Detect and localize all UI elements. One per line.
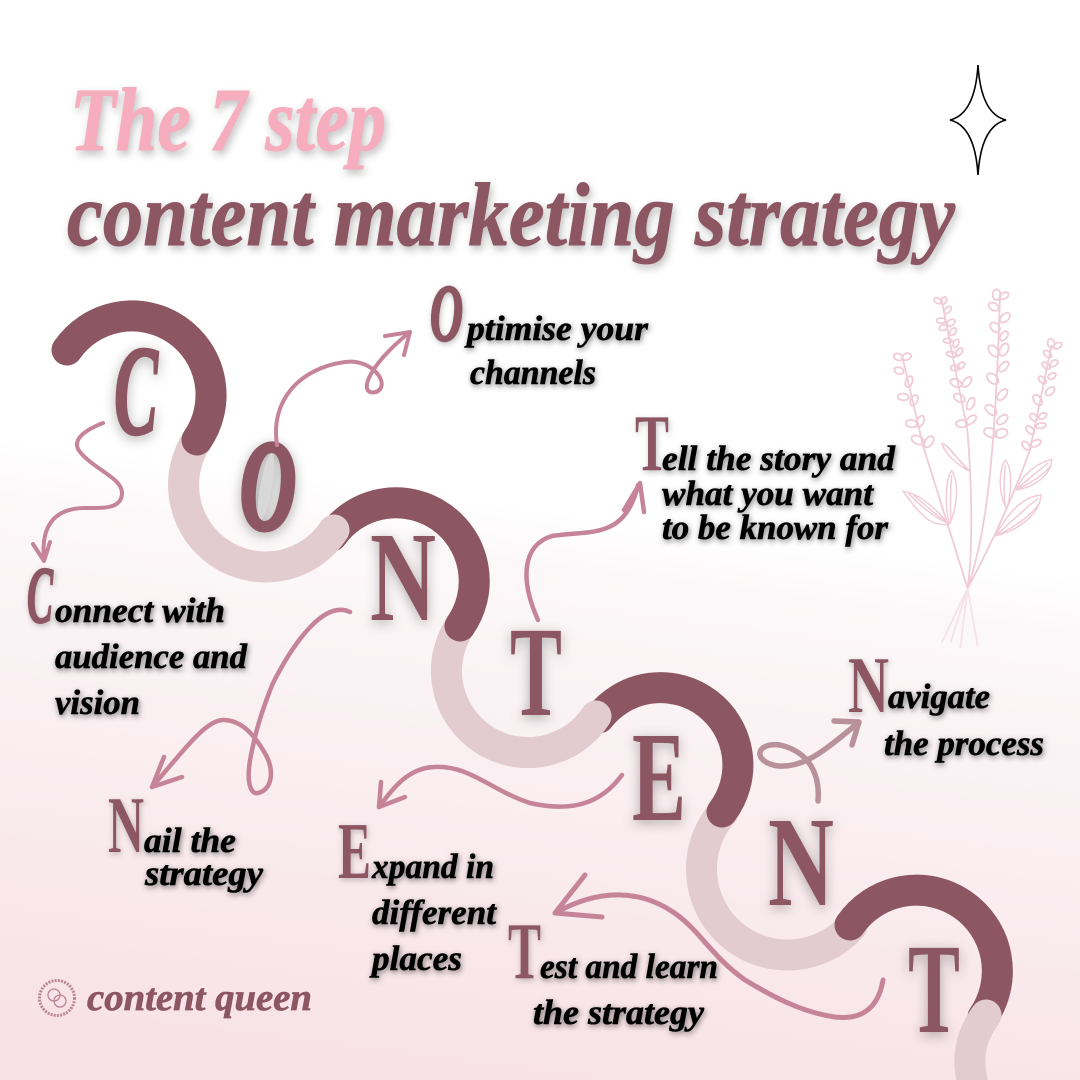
step: Connect: C (27, 552, 54, 640)
step: Tell: what you want (662, 474, 874, 513)
step: Nail: ail the (144, 821, 236, 860)
step: Connect (27, 552, 247, 722)
road letters: T (510, 601, 562, 743)
logo icon (40, 980, 74, 1016)
arrow: N to Nail (152, 610, 350, 793)
step: Optimise: channels (470, 353, 596, 392)
road letters: C (114, 320, 159, 462)
step: Test: est and learn (540, 947, 718, 986)
step: Navigate: N (848, 642, 889, 730)
step: Optimise: O (430, 270, 463, 358)
step: Expand: different (372, 893, 497, 932)
road letters: O (240, 415, 296, 557)
step: Tell (635, 400, 895, 547)
step: Nail: strategy (144, 854, 263, 893)
title: The 7 step (70, 71, 386, 170)
icon: lavender plant (893, 289, 1063, 648)
road letters: T (908, 918, 960, 1060)
title: content marketing strategy (67, 166, 956, 265)
arrow: T to Test (555, 875, 883, 1018)
road letters: N (370, 506, 436, 648)
step: Tell: ell the story and (662, 439, 895, 478)
step: Navigate: the process (884, 724, 1044, 763)
step: Expand: places (369, 939, 462, 978)
road letters: N (768, 791, 834, 933)
step: Connect: vision (55, 683, 140, 722)
step: Optimise: ptimise your (464, 309, 648, 348)
arrow: O to Optimise (276, 332, 410, 445)
step: Expand: E (338, 808, 371, 896)
title (67, 71, 956, 265)
road letters (114, 320, 960, 1060)
step: Expand: xpand in (371, 847, 494, 886)
step: Connect: audience and (55, 637, 247, 676)
step: Tell: T (635, 400, 669, 488)
step: Optimise (430, 270, 648, 392)
step: Connect: onnect with (55, 591, 225, 630)
icon: four-point star (950, 65, 1006, 175)
step: Test: T (508, 908, 541, 996)
arrow: N to Navigate (760, 721, 859, 801)
arrow: C to Connect (33, 423, 122, 561)
arrow: E to Expand (379, 767, 622, 807)
step: Test (508, 908, 718, 1032)
arrow: T to Tell (526, 483, 644, 620)
step: Expand (338, 808, 497, 978)
step: Nail (108, 782, 263, 893)
step: Test: the strategy (533, 993, 704, 1032)
serpentine road (67, 316, 997, 1080)
step: Tell: to be known for (662, 508, 888, 547)
step: Navigate (848, 642, 1044, 763)
step: Navigate: avigate (888, 677, 990, 716)
road letters: E (632, 706, 686, 848)
step: Nail: N (108, 782, 144, 870)
brand name: content queen (87, 977, 312, 1019)
